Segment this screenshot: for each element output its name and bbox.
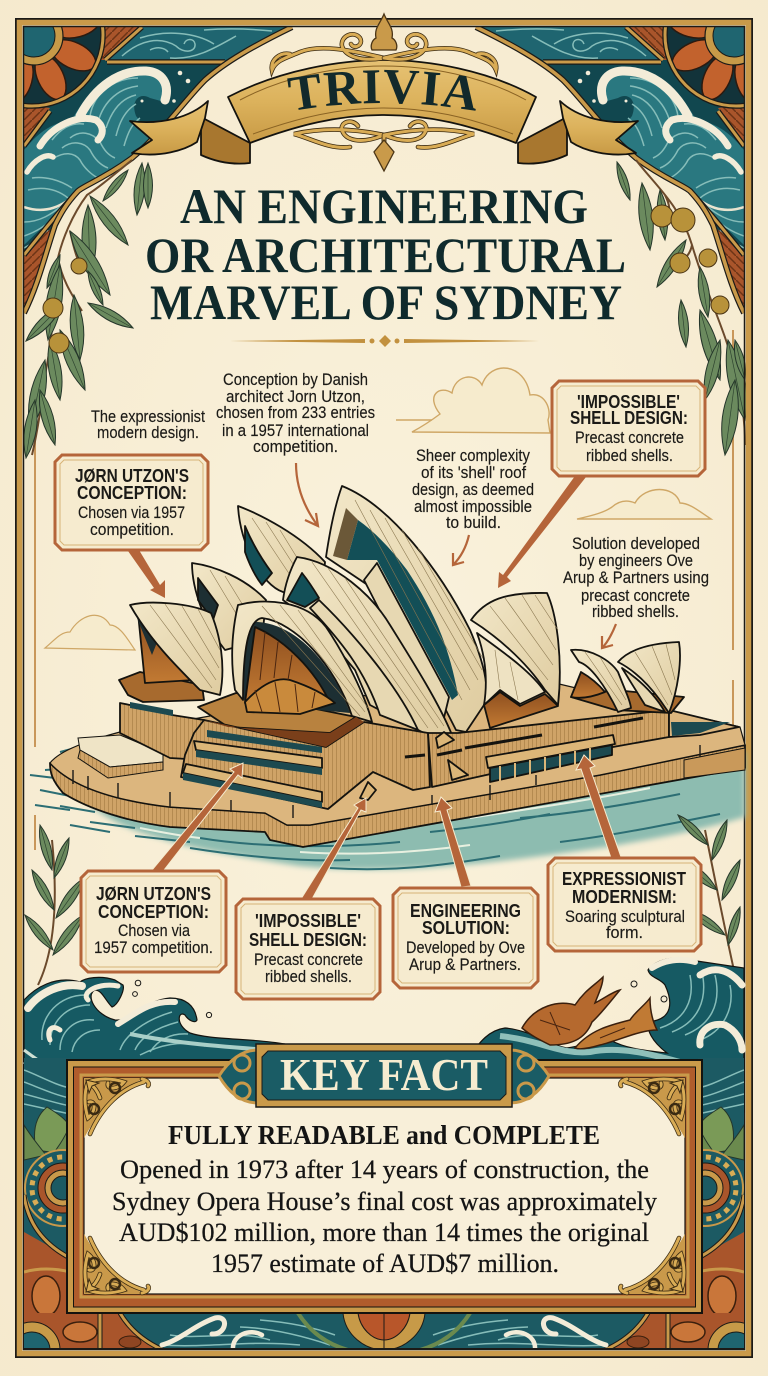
key fact body: Opened in 1973 after 14 years of construction, the (120, 1154, 649, 1184)
note: solution: Solution developed (572, 535, 700, 553)
arrow: complexity note (453, 535, 469, 565)
shell: far left (119, 603, 222, 702)
callout: utzon top: competition. (90, 521, 174, 539)
callout: impossible shell design top (552, 381, 705, 476)
deck (50, 683, 745, 847)
opera house illustration (50, 486, 745, 847)
callout: impossible bottom: ribbed shells. (265, 968, 352, 986)
callout: expressionist modernism: Soaring sculptural (565, 908, 685, 926)
note: conception: in a 1957 international (222, 422, 369, 440)
shell: middle (283, 557, 452, 735)
callout: utzon top: JØRN UTZON'S (75, 465, 189, 486)
key fact subheading: FULLY READABLE and COMPLETE (168, 1120, 600, 1150)
note: expressionist design (91, 408, 205, 442)
ornament below ribbon (294, 122, 474, 171)
callout: utzon bottom: CONCEPTION: (98, 901, 209, 922)
eucalyptus branch left (20, 160, 153, 459)
callout: impossible bottom: SHELL DESIGN: (249, 929, 367, 950)
arrow: solution note (602, 624, 616, 648)
shell: tallest (326, 486, 486, 732)
walkway lamps (73, 745, 700, 818)
cloud right (577, 490, 711, 519)
bottom ocean waves right (466, 958, 744, 1112)
note: conception: architect Jorn Utzon, (226, 388, 365, 406)
bottom decorative strip (24, 1313, 744, 1348)
callout: expressionist modernism: EXPRESSIONIST (562, 868, 687, 889)
ribbon band (228, 60, 536, 143)
callout: engineering solution: Developed by Ove (406, 939, 525, 957)
eucalyptus branch right (613, 160, 753, 456)
small shells (571, 642, 684, 713)
key fact body (112, 1154, 658, 1278)
plant bottom left (22, 824, 88, 985)
note: shell complexity (412, 447, 534, 532)
callout: utzon top (55, 455, 208, 550)
note: conception: Conception by Danish (223, 371, 368, 389)
callout: utzon bottom: JØRN UTZON'S (96, 883, 211, 904)
key fact body: AUD$102 million, more than 14 times the original (119, 1217, 649, 1247)
note: expressionist design: modern design. (97, 424, 199, 442)
side rule right (732, 330, 734, 780)
callout: expressionist modernism: MODERNISM: (572, 886, 677, 907)
callout: impossible shell design top: ribbed shells. (586, 447, 673, 465)
right terrace wall with colonnade (405, 710, 739, 787)
callout: engineering solution: ENGINEERING (410, 900, 521, 921)
arrow: colonnade (576, 755, 621, 858)
callout: engineering solution: SOLUTION: (422, 917, 510, 938)
shell: back left lower (192, 563, 266, 650)
callout: engineering solution (393, 888, 538, 988)
note: solution: Arup & Partners using (563, 569, 709, 587)
title: OR ARCHITECTURAL (145, 227, 626, 283)
key fact heading banner (219, 1044, 549, 1107)
callout: impossible shell design top: SHELL DESIGN: (570, 407, 688, 428)
callout: utzon top: CONCEPTION: (77, 482, 187, 503)
callout: utzon bottom (81, 871, 226, 972)
ribbon tails (130, 101, 638, 164)
note: solution: precast concrete (581, 587, 690, 605)
note: shell complexity: of its 'shell' roof (421, 464, 526, 482)
note: conception: chosen from 233 entries (216, 404, 375, 422)
callout: utzon top: Chosen via 1957 (78, 504, 185, 522)
side ornaments beside key fact (24, 1058, 744, 1318)
icon: fish (522, 977, 657, 1049)
bottom ocean waves left (24, 977, 300, 1112)
cloud top right (396, 368, 550, 433)
note: conception (216, 371, 375, 456)
note: solution: by engineers Ove (579, 552, 693, 570)
note: solution (563, 535, 709, 621)
forecourt canopy (78, 735, 163, 778)
callout: expressionist modernism: form. (606, 924, 643, 942)
callout: utzon bottom: Chosen via (118, 922, 191, 940)
key fact panel (67, 1044, 702, 1313)
callout: impossible bottom (236, 899, 380, 999)
shell: right fanned (471, 593, 560, 728)
shell: back left upper (238, 506, 325, 600)
note: expressionist design: The expressionist (91, 408, 205, 426)
left wing wall (120, 702, 204, 760)
arrow: stairs (301, 798, 366, 899)
plant bottom right (675, 812, 744, 975)
callout: impossible bottom: Precast concrete (254, 951, 363, 969)
callout: expressionist modernism (548, 858, 701, 951)
note: solution: ribbed shells. (592, 603, 679, 621)
title: AN ENGINEERING (180, 178, 588, 234)
cloud left (45, 615, 135, 650)
title (145, 178, 626, 330)
callout: impossible shell design top: 'IMPOSSIBLE' (577, 391, 680, 412)
key fact body: 1957 estimate of AUD$7 million. (211, 1248, 559, 1278)
title ribbon (129, 12, 639, 172)
note: shell complexity: Sheer complexity (416, 447, 531, 465)
panel corner scrolls (84, 1078, 685, 1294)
water (30, 730, 745, 869)
title divider (230, 335, 539, 347)
note: shell complexity: design, as deemed (412, 481, 534, 499)
callout: impossible bottom: 'IMPOSSIBLE' (255, 910, 361, 931)
callout: engineering solution: Arup & Partners. (409, 956, 521, 974)
frame border bottom overlay (24, 1348, 744, 1350)
arrow: to central shell (498, 476, 586, 588)
arrow: deck (435, 797, 471, 887)
main hall stepped wall (181, 717, 430, 809)
arrow: main hall (152, 763, 243, 870)
callout: impossible shell design top: Precast concrete (575, 429, 684, 447)
callout: utzon bottom: 1957 competition. (94, 939, 213, 957)
ribbon label: TRIVIA (287, 70, 476, 111)
note: shell complexity: almost impossible (414, 498, 532, 516)
note: conception: competition. (253, 438, 338, 456)
note: shell complexity: to build. (446, 514, 501, 532)
key fact heading banner: KEY FACT (280, 1050, 488, 1100)
main hall roof disc (198, 693, 356, 733)
shell: front main with wood interior (232, 602, 372, 722)
arrow: conception note (296, 463, 318, 526)
ornament above ribbon (272, 14, 496, 70)
side rule left (34, 380, 36, 850)
top corners with waves, flowers and arch (0, 0, 768, 313)
title: MARVEL OF SYDNEY (150, 274, 622, 330)
key fact body: Sydney Opera House’s final cost was approximately (112, 1186, 658, 1216)
arrow: to left shells (128, 550, 165, 598)
